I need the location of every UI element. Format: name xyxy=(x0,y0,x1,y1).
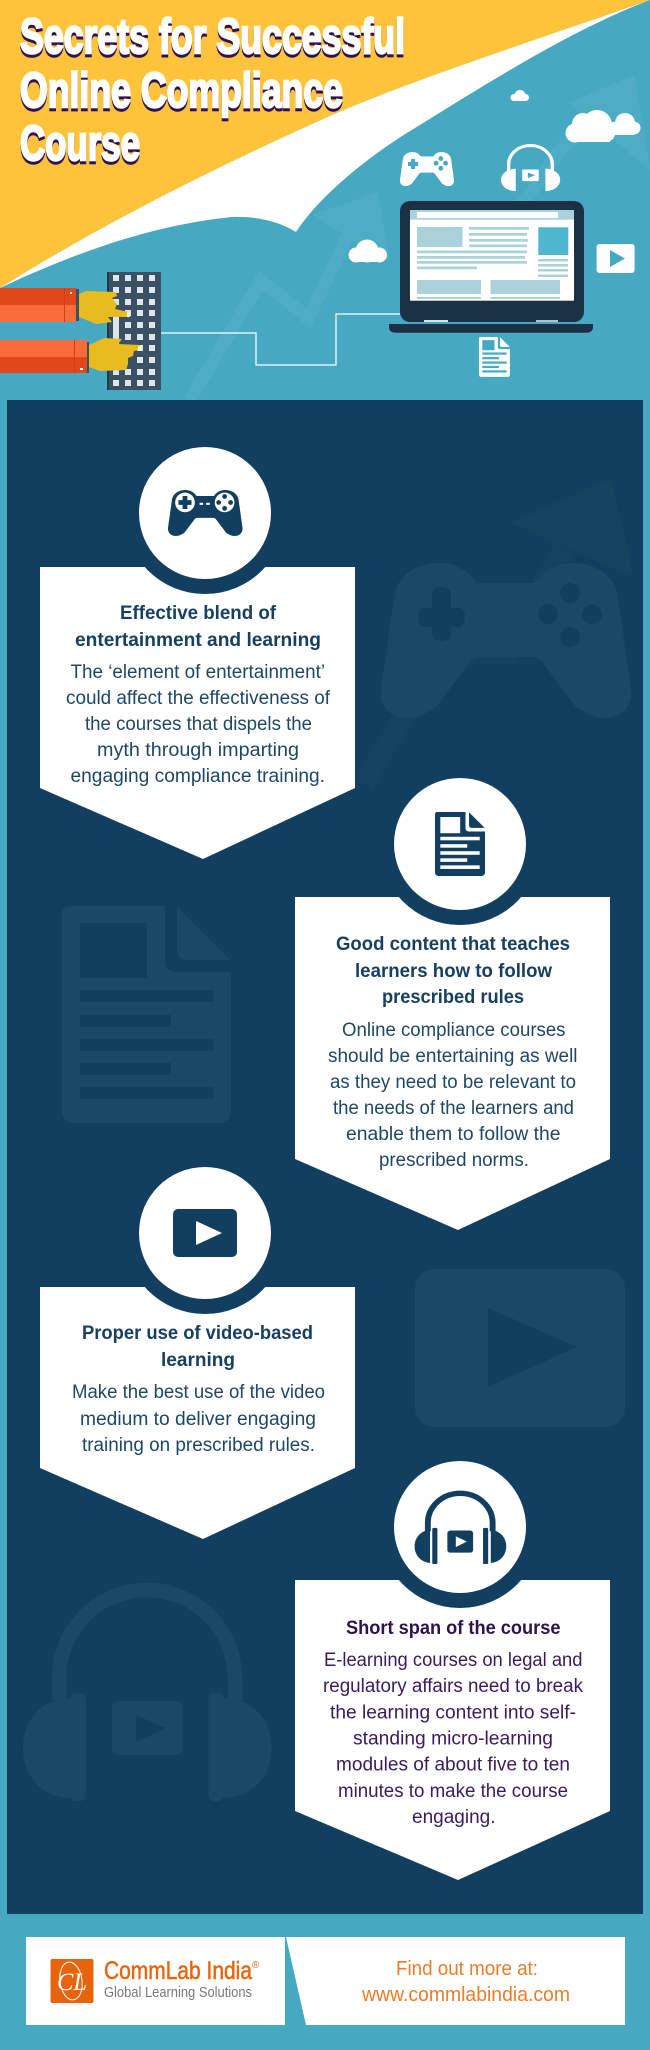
footer xyxy=(26,1937,625,2025)
icon: header headphones xyxy=(501,146,560,191)
icon: CommLab logo mark: CL xyxy=(57,1969,87,1996)
icon: gamepad in circle xyxy=(124,432,286,594)
body text: Make the best use of the video xyxy=(72,1382,325,1403)
icon: header gamepad xyxy=(400,152,454,186)
header banner xyxy=(0,0,650,400)
connector wire xyxy=(161,314,400,365)
body text: modules of about five to ten xyxy=(336,1755,570,1776)
icon: left cloud xyxy=(348,240,387,262)
card shape xyxy=(295,897,610,1230)
watermark: document xyxy=(62,906,231,1123)
heading xyxy=(82,1323,313,1371)
icon: large cloud xyxy=(566,110,640,142)
title: Online Compliance xyxy=(20,64,343,118)
body text: the needs of the learners and xyxy=(333,1098,574,1119)
body text: the courses that dispels the xyxy=(85,714,312,735)
heading: learners how to follow xyxy=(355,961,552,982)
logo box xyxy=(26,1937,285,2025)
title: Secrets for Successful xyxy=(20,10,405,64)
laptop xyxy=(389,201,593,333)
panel: video-based learning xyxy=(40,1152,355,1539)
body text xyxy=(328,1020,578,1171)
body text xyxy=(72,1382,325,1456)
body text: standing micro-learning xyxy=(353,1728,553,1750)
heading: prescribed rules xyxy=(382,987,524,1008)
heading xyxy=(75,603,321,651)
body text xyxy=(66,662,331,787)
body text: could affect the effectiveness of xyxy=(66,688,331,709)
icon: header document xyxy=(479,337,510,377)
keyboard xyxy=(107,272,161,390)
laptop screen xyxy=(410,210,574,301)
heading: entertainment and learning xyxy=(75,630,321,651)
heading: Short span of the course xyxy=(346,1618,560,1639)
heading: Good content that teaches xyxy=(336,934,570,955)
body text: training on prescribed rules. xyxy=(82,1435,315,1456)
icon: header video xyxy=(597,244,635,273)
body text: engaging. xyxy=(412,1807,496,1828)
call to action: Find out more at: xyxy=(396,1958,538,1980)
body text: medium to deliver engaging xyxy=(80,1409,316,1430)
body text: the learning content into self- xyxy=(330,1702,576,1724)
body text: enable them to follow the xyxy=(346,1124,560,1145)
card shape xyxy=(40,1287,355,1539)
icon: CommLab logo mark xyxy=(50,1959,94,2003)
body text: myth through imparting xyxy=(97,740,299,761)
body text: engaging compliance training. xyxy=(70,766,325,787)
body text: as they need to be relevant to xyxy=(330,1072,576,1093)
company name: CommLab India xyxy=(104,1957,252,1985)
background arrow xyxy=(356,478,634,790)
upper arm and hand xyxy=(0,288,130,324)
registered mark: ® xyxy=(252,1960,260,1971)
body text: regulatory affairs need to break xyxy=(323,1676,583,1697)
card shape xyxy=(40,567,355,859)
icon: small cloud xyxy=(510,90,529,101)
icon: video in circle xyxy=(124,1152,286,1314)
panel: effective blend of entertainment and learning xyxy=(40,432,355,859)
panel: short span of the course xyxy=(295,1446,610,1880)
icon: headphones in circle xyxy=(379,1446,541,1608)
heading: Proper use of video-based xyxy=(82,1323,313,1344)
heading: Effective blend of xyxy=(120,603,277,624)
call to action: www.commlabindia.com xyxy=(361,1984,570,2006)
panel: good content xyxy=(295,763,610,1230)
body text: prescribed norms. xyxy=(379,1150,529,1171)
card shape xyxy=(295,1580,610,1880)
call to action xyxy=(286,1937,625,2025)
yellow corner xyxy=(0,0,650,288)
body text: The ‘element of entertainment’ xyxy=(70,662,325,683)
tagline: Global Learning Solutions xyxy=(104,1984,252,2001)
lower arm and hand xyxy=(0,338,141,373)
heading: learning xyxy=(161,1350,235,1371)
body text: should be entertaining as well xyxy=(328,1046,578,1067)
body text: minutes to make the course xyxy=(338,1781,568,1802)
title xyxy=(20,10,405,171)
watermark: gamepad xyxy=(381,563,631,718)
watermark: video xyxy=(415,1269,625,1427)
watermark: headphones xyxy=(23,1590,272,1801)
body text xyxy=(323,1650,583,1828)
body text: E-learning courses on legal and xyxy=(324,1650,582,1671)
heading xyxy=(336,934,570,1008)
body text: Online compliance courses xyxy=(342,1020,566,1041)
background arrows xyxy=(190,75,650,400)
title: Course xyxy=(20,117,140,171)
icon: document in circle xyxy=(379,763,541,925)
white page curl xyxy=(0,0,650,288)
main navy panel xyxy=(7,400,643,1914)
